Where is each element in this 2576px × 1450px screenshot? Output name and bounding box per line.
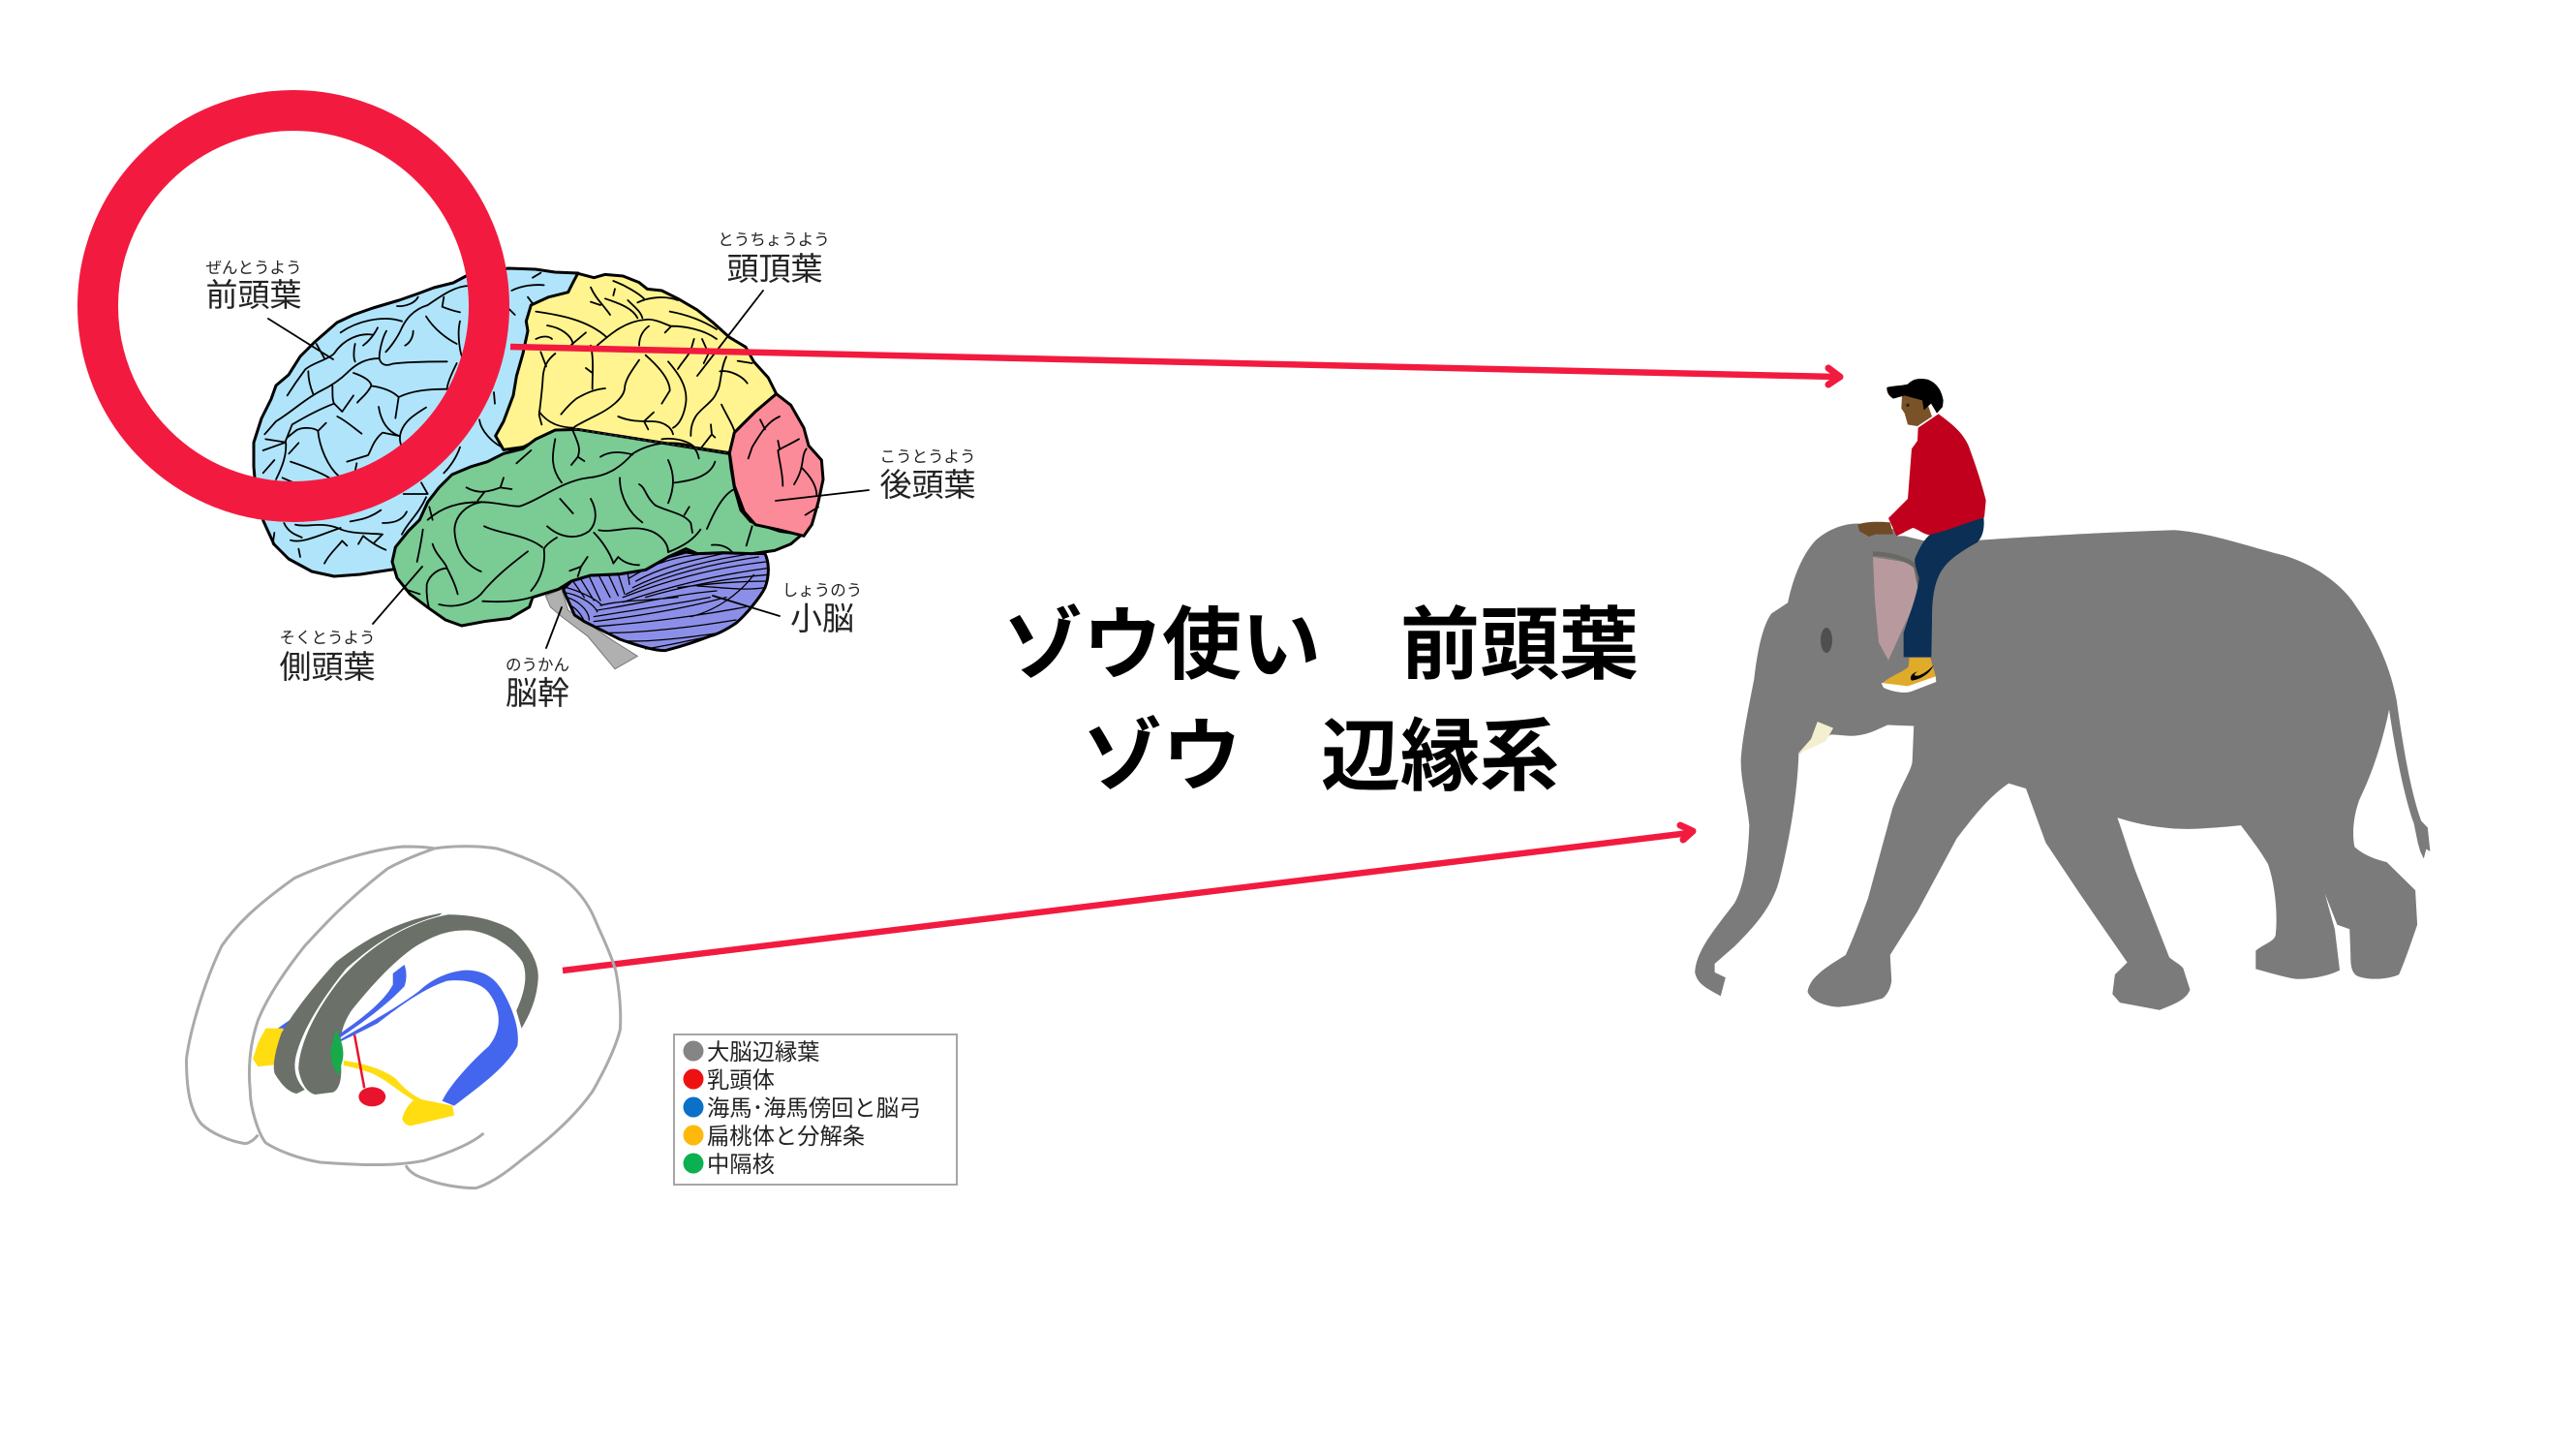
septal nucleus [330, 1030, 343, 1076]
occipital lobe [729, 394, 823, 536]
red ring highlighting frontal lobe [98, 110, 489, 502]
label: occipital lobe: 後頭葉 [879, 467, 976, 503]
ear [1873, 557, 1920, 661]
shoe logo [1911, 665, 1934, 681]
arrow: limbic system to elephant [563, 825, 1693, 971]
label: brain stem [506, 657, 569, 711]
elephant body [1695, 524, 2430, 1010]
label: frontal lobe: 前頭葉 [205, 277, 302, 313]
trousers [1904, 517, 1984, 657]
tusk [1797, 722, 1833, 754]
arrow: frontal lobe to rider [510, 347, 1840, 385]
label: parietal lobe [718, 231, 830, 287]
eye [1821, 628, 1832, 653]
cerebellum [564, 552, 768, 651]
jacket [1888, 414, 1986, 536]
parietal lobe sulci [536, 281, 752, 459]
hand [1857, 522, 1893, 537]
label: cerebellum: しょうのう [782, 582, 862, 600]
parietal lobe [496, 273, 777, 453]
hippocampus and fornix [340, 971, 518, 1106]
title text: ゾウ 辺縁系 [1083, 713, 1559, 801]
title text [1003, 602, 1639, 801]
face [1901, 394, 1932, 426]
gap under jacket [1896, 528, 1927, 540]
elephant with rider [1695, 379, 2430, 1010]
legend: amygdala: 扁桃体と分解条 [707, 1124, 865, 1149]
cap and hair [1886, 379, 1944, 414]
temporal lobe [392, 429, 802, 626]
label: temporal lobe: そくとうよう [279, 630, 376, 647]
fornix upper branch [338, 965, 407, 1037]
legend: mammillary body: 乳頭体 [707, 1067, 775, 1093]
frontal lobe sulci [263, 273, 544, 564]
brain lateral diagram [205, 231, 976, 711]
brain outline [186, 847, 621, 1188]
dotted lobe boundary [574, 429, 729, 453]
legend: septal nucleus: 中隔核 [707, 1152, 775, 1177]
title text: ゾウ使い 前頭葉 [1003, 602, 1639, 690]
label: occipital lobe: こうとうよう [879, 448, 976, 466]
frontal lobe [254, 268, 578, 576]
label: frontal lobe: ぜんとうよう [205, 260, 302, 277]
legend box [674, 1034, 957, 1185]
label: cerebellum [782, 582, 862, 636]
small blue segment behind [278, 1019, 291, 1030]
rider and ear [1857, 379, 1986, 693]
limbic lobe main band [298, 914, 538, 1095]
label: frontal lobe [205, 260, 302, 313]
stria terminalis and amygdala [344, 1061, 454, 1126]
shoe sole [1882, 676, 1936, 693]
occipital lobe sulci [749, 416, 818, 515]
label: cerebellum: 小脳 [790, 601, 854, 636]
shoe [1882, 658, 1936, 688]
mammillary body [358, 1087, 385, 1106]
label: temporal lobe: 側頭葉 [279, 649, 376, 685]
label: brain stem: 脳幹 [506, 675, 569, 711]
label: parietal lobe: 頭頂葉 [726, 251, 823, 287]
legend: hippocampus: 海馬･海馬傍回と脳弓 [707, 1095, 921, 1121]
left yellow structure [253, 1029, 283, 1066]
temporal lobe sulci [405, 431, 752, 608]
legend: limbic lobe: 大脳辺縁葉 [707, 1039, 819, 1064]
cerebellum folds [564, 554, 768, 649]
leader lines [268, 291, 869, 648]
limbic system diagram [186, 847, 621, 1188]
rider eye [1906, 404, 1910, 407]
brain stem [545, 589, 637, 669]
label: parietal lobe: とうちょうよう [718, 231, 830, 249]
ear rim [1873, 554, 1920, 588]
label: brain stem: のうかん [506, 657, 569, 674]
limbic lobe outer band [274, 913, 443, 1094]
label: temporal lobe [279, 630, 376, 685]
label: occipital lobe [879, 448, 976, 503]
mammillary tract [354, 1034, 364, 1088]
